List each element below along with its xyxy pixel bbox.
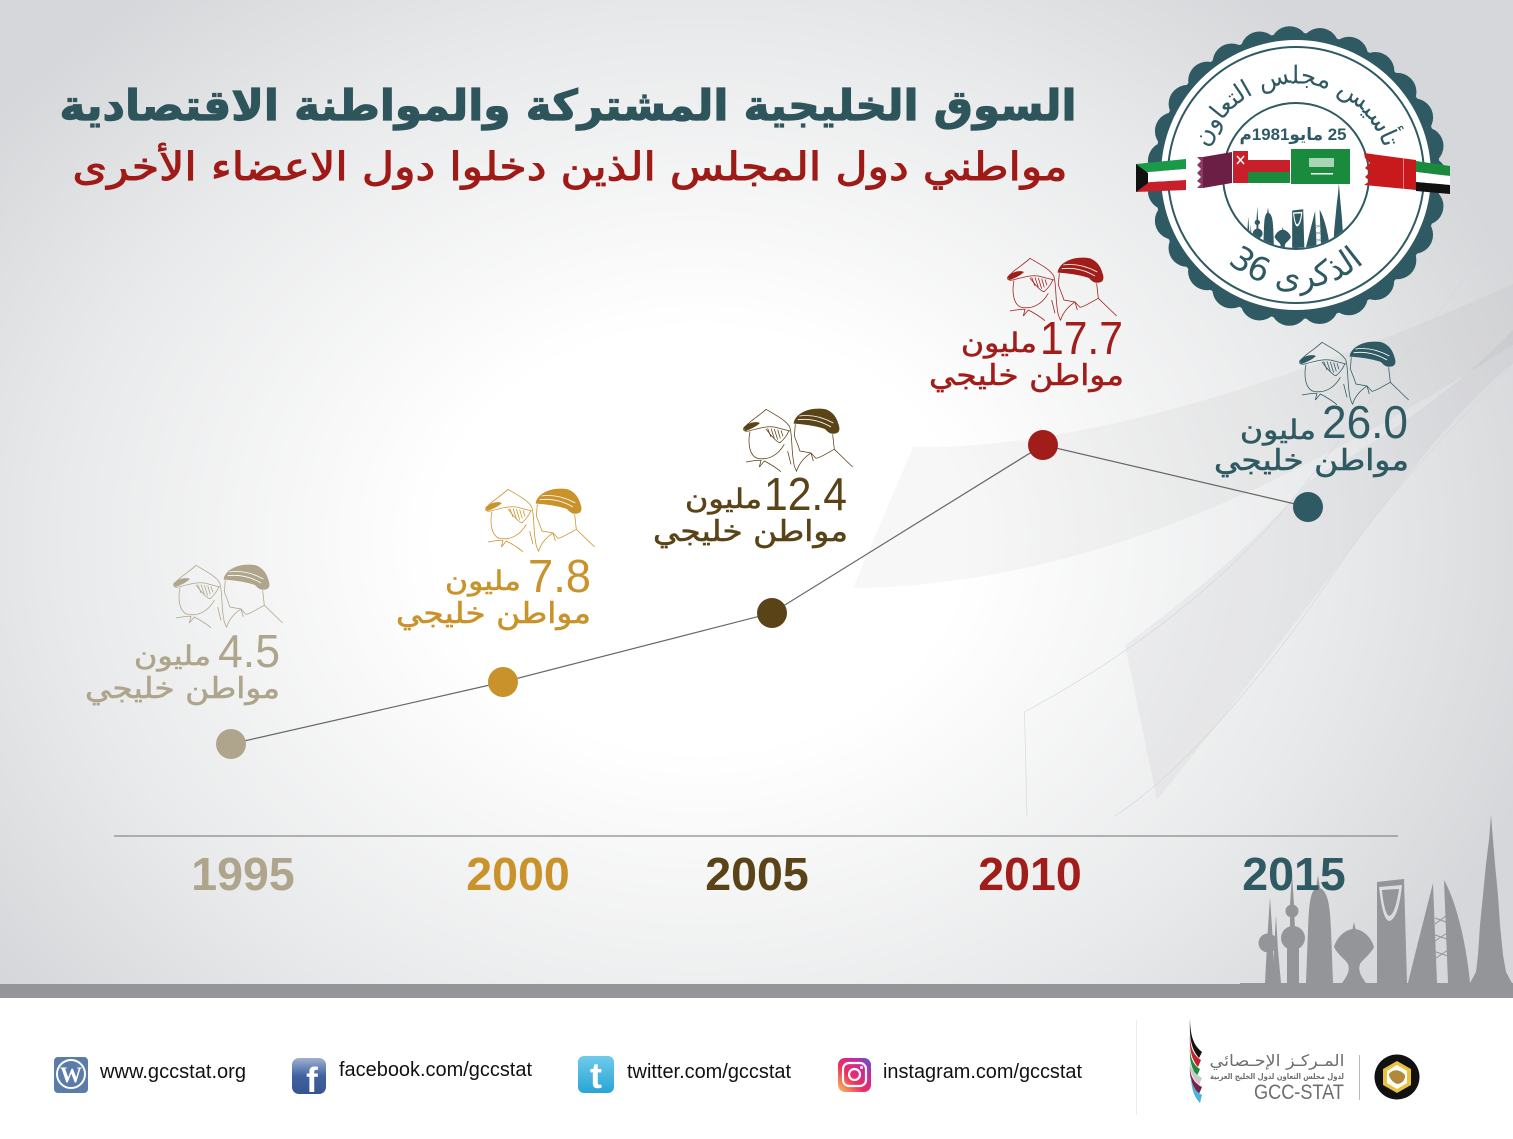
website link: [54, 1057, 246, 1093]
callout 2005: 12.4: [764, 468, 847, 520]
callout 2010: مواطن خليجي: [929, 358, 1124, 393]
title: السوق الخليجية المشتركة والمواطنة الاقتصادية: [60, 81, 1076, 131]
callout 2015: مليون: [1240, 415, 1316, 446]
point 2015: [1293, 492, 1323, 522]
twitter link: t: [590, 1055, 602, 1096]
callout 1995: 4.5: [218, 625, 280, 677]
facebook link: [292, 1058, 532, 1100]
callout 2015: 26.0: [1322, 396, 1408, 448]
flag: Bahrain: [1364, 153, 1416, 190]
GCC-STAT logo: المـركـز الإحـصائي: [1210, 1051, 1344, 1071]
stamp bottom text: الذكرى 36: [1230, 244, 1362, 296]
callout 2015: مواطن خليجي: [1214, 443, 1409, 478]
stamp top text: تأسيس مجلس التعاون: [1200, 64, 1404, 146]
callout 1995: [85, 565, 283, 706]
facebook link: facebook.com/gccstat: [339, 1059, 532, 1081]
year labels: [191, 848, 1346, 900]
callout 2000: مليون: [445, 566, 521, 597]
GCC-STAT logo: لدول مجلس التعاون لدول الخليج العربية: [1210, 1072, 1344, 1082]
point 2005: [757, 598, 787, 628]
year labels: 2005: [705, 848, 809, 900]
callout 1995: مليون: [134, 641, 211, 672]
anniversary stamp: [1136, 26, 1450, 326]
decorative swooshes: [853, 212, 1513, 816]
stamp skyline: [1248, 184, 1343, 248]
instagram link: [838, 1058, 1082, 1092]
callout 2000: [396, 489, 595, 631]
website link: www.gccstat.org: [99, 1061, 246, 1083]
callout 2005: مليون: [685, 484, 762, 515]
GCC emblem: [1374, 1054, 1420, 1100]
GCC-STAT logo: [1190, 1018, 1360, 1104]
GCC-STAT logo: GCC-STAT: [1254, 1081, 1344, 1104]
flag: Oman: [1233, 151, 1290, 183]
instagram link: instagram.com/gccstat: [883, 1061, 1082, 1083]
website link: W: [60, 1062, 82, 1087]
flag: UAE: [1416, 161, 1450, 194]
skyline: [1240, 815, 1513, 998]
year labels: 1995: [191, 848, 295, 900]
flag: Kuwait: [1136, 159, 1186, 192]
subtitle: مواطني دول المجلس الذين دخلوا دول الاعضاء الأخرى: [72, 142, 1068, 190]
bottom band: [0, 984, 1513, 998]
point 1995: [216, 729, 246, 759]
flag: Qatar: [1197, 152, 1232, 188]
callout 2005: مواطن خليجي: [653, 514, 848, 549]
point 2010: [1028, 430, 1058, 460]
callout 2010: [929, 258, 1124, 393]
stamp date: 25 مايو1981م: [1240, 125, 1346, 145]
facebook link: f: [306, 1061, 318, 1100]
callout 2015: [1214, 342, 1409, 478]
year labels: 2000: [466, 848, 570, 900]
flag: Saudi Arabia: [1291, 149, 1350, 184]
twitter link: twitter.com/gccstat: [627, 1061, 791, 1083]
year labels: 2010: [978, 848, 1082, 900]
axis line: [114, 835, 1398, 837]
callout 2000: مواطن خليجي: [396, 596, 591, 631]
callout 2010: 17.7: [1040, 312, 1123, 364]
callout 2000: 7.8: [528, 550, 591, 602]
footer: [0, 998, 1513, 1139]
point 2000: [488, 667, 518, 697]
callout 2010: مليون: [961, 328, 1037, 359]
year labels: 2015: [1242, 848, 1346, 900]
twitter link: [578, 1055, 791, 1096]
line chart: [216, 430, 1323, 759]
callout 2005: [653, 409, 853, 549]
callout 1995: مواطن خليجي: [85, 671, 280, 706]
